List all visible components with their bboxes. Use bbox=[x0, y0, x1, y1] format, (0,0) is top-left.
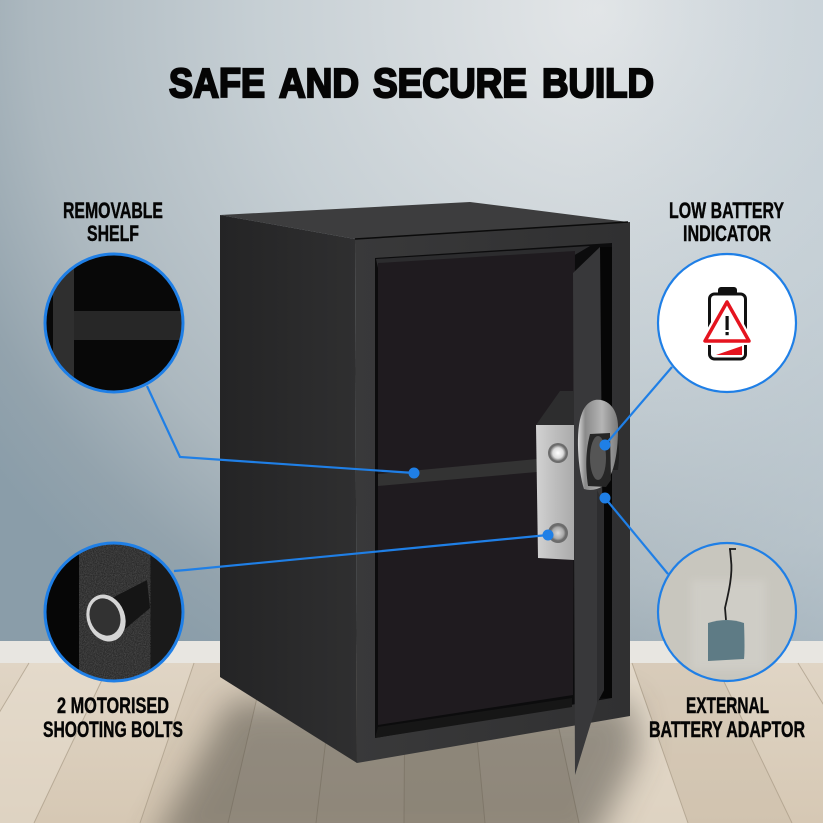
label: EXTERNAL bbox=[686, 693, 769, 718]
handle bbox=[578, 400, 618, 490]
label: INDICATOR bbox=[683, 221, 771, 246]
handle keypad bbox=[612, 415, 619, 470]
bolt head lower bbox=[548, 523, 568, 543]
circle background bbox=[658, 254, 796, 392]
line: low battery bbox=[605, 367, 672, 445]
label: SHELF bbox=[87, 221, 139, 246]
shelf bbox=[378, 459, 537, 486]
label: 2 MOTORISED bbox=[57, 693, 169, 718]
title: SECURE bbox=[373, 60, 527, 106]
bolt head upper bbox=[548, 443, 568, 463]
safe front frame bbox=[355, 222, 630, 763]
background: wooden floor bbox=[0, 663, 823, 823]
panel: low battery indicator bbox=[658, 198, 796, 392]
interior back wall bbox=[378, 251, 575, 725]
safe left side bbox=[220, 215, 357, 763]
label: REMOVABLE bbox=[63, 198, 163, 223]
safe floor shadow bbox=[150, 700, 640, 823]
label bbox=[63, 198, 163, 246]
safe opening bbox=[375, 243, 612, 738]
safe bbox=[220, 202, 630, 775]
circle photo: shelf bbox=[45, 254, 183, 392]
title bbox=[169, 60, 654, 106]
panel: motorised bolts bbox=[43, 543, 183, 742]
circle photo: adaptor bbox=[658, 543, 796, 681]
opened door bbox=[573, 247, 604, 775]
interior top lip bbox=[376, 246, 590, 268]
lock plate bbox=[536, 425, 574, 560]
label: SHOOTING BOLTS bbox=[43, 717, 183, 742]
title: AND bbox=[279, 60, 359, 106]
lock plate top bbox=[536, 391, 574, 425]
handle recess bbox=[586, 433, 611, 487]
background: skirting board bbox=[0, 641, 823, 664]
interior bottom lip bbox=[375, 698, 572, 738]
safe top face bbox=[220, 202, 628, 239]
panel: removable shelf bbox=[45, 198, 183, 392]
background: wall bbox=[0, 0, 823, 642]
callout dots bbox=[408, 440, 610, 540]
panel: external battery adaptor bbox=[649, 543, 805, 742]
title: BUILD bbox=[542, 60, 654, 106]
line: battery adaptor bbox=[605, 498, 668, 574]
gap inside door bbox=[600, 247, 612, 698]
line: shelf bbox=[147, 386, 414, 473]
label bbox=[649, 693, 805, 742]
handle recess highlight bbox=[590, 436, 606, 480]
callout lines bbox=[147, 367, 672, 574]
title: SAFE bbox=[169, 60, 265, 106]
circle photo: bolt bbox=[45, 543, 183, 681]
label bbox=[669, 198, 784, 246]
label bbox=[43, 693, 183, 742]
line: bolts bbox=[174, 535, 548, 571]
icon: battery warning bbox=[705, 287, 749, 359]
frame edge line bbox=[355, 222, 628, 239]
door lower bracket bbox=[597, 490, 604, 703]
